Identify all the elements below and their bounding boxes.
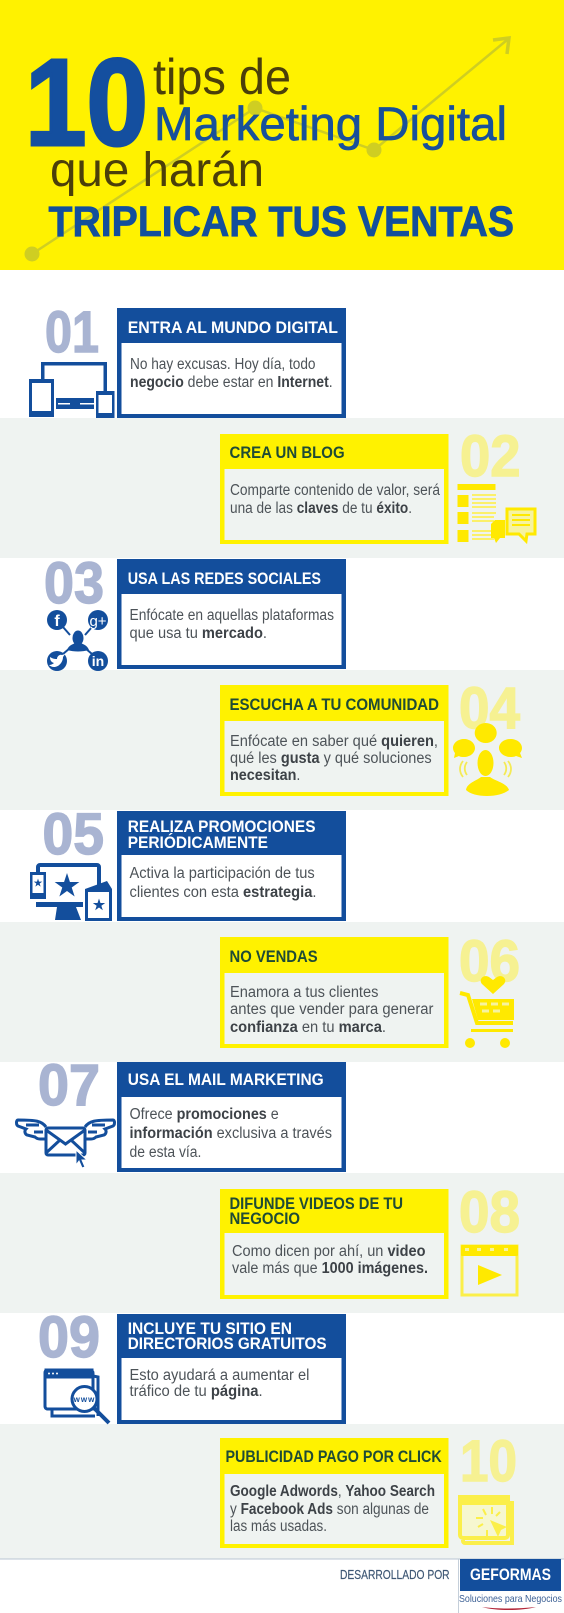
panel: tip 09: Esto ayudará a aumentar el (130, 1367, 309, 1384)
panel: tip 04: ESCUCHA A TU COMUNIDAD (230, 696, 439, 714)
icon: winged mail (16, 1120, 114, 1168)
panel: tip 10: PUBLICIDAD PAGO POR CLICK (226, 1448, 442, 1466)
panel: tip 07: USA EL MAIL MARKETING (128, 1071, 324, 1089)
panel: tip 09 (38, 1305, 346, 1424)
growth line chart (24, 38, 509, 262)
panel: tip 06 (220, 929, 520, 1048)
panel: tip 10: Google Adwords, Yahoo Search (230, 1483, 435, 1500)
title: TRIPLICAR TUS VENTAS (48, 198, 514, 246)
icon: social network: in (92, 653, 104, 669)
panel: tip 08: NEGOCIO (230, 1210, 300, 1228)
panel: tip 05: Activa la participación de tus (130, 865, 315, 882)
icon: website search (45, 1370, 109, 1423)
panel: tip 03 (44, 551, 346, 671)
icon: promotions on screens (30, 863, 112, 921)
panel: tip 06: confianza en tu marca. (230, 1019, 386, 1036)
panel: tip 10 (220, 1429, 517, 1548)
panel: tip 05: 05 (42, 802, 104, 867)
panel: tip 09: tráfico de tu página. (130, 1383, 263, 1400)
panel: tip 10: 10 (460, 1429, 517, 1494)
panel: tip 02: 02 (460, 424, 520, 489)
panel: tip 06: NO VENDAS (230, 948, 318, 966)
panel: tip 06: antes que vender para generar (230, 1001, 434, 1018)
panel: tip 03: 03 (44, 551, 104, 616)
title: que harán (50, 144, 264, 197)
panel: tip 01 (29, 300, 346, 418)
panel: tip 04: necesitan. (230, 767, 300, 784)
footer (0, 1558, 564, 1613)
panel: tip 09: 09 (38, 1305, 100, 1370)
icon: video player (461, 1245, 518, 1295)
panel: tip 06: 06 (459, 929, 520, 994)
panel: tip 08: vale más que 1000 imágenes. (232, 1260, 428, 1277)
panel: tip 07: información exclusiva a través (130, 1125, 332, 1142)
panel: tip 03: Enfócate en aquellas plataformas (130, 607, 334, 624)
panel: tip 01: ENTRA AL MUNDO DIGITAL (128, 319, 338, 337)
icon: devices (29, 362, 114, 418)
panel: tip 08: 08 (459, 1180, 520, 1245)
header banner (0, 0, 564, 270)
panel: tip 04: 04 (459, 676, 520, 741)
panel: tip 10: y Facebook Ads son algunas de (230, 1501, 429, 1518)
panel: tip 10: las más usadas. (230, 1518, 327, 1535)
icon: social network: f (54, 613, 60, 630)
panel: tip 08 (220, 1180, 520, 1299)
icon: social network (47, 610, 108, 671)
credit text: DESARROLLADO POR (340, 1567, 450, 1582)
panel: tip 01: 01 (45, 300, 99, 365)
panel: tip 09: DIRECTORIOS GRATUITOS (128, 1335, 327, 1353)
title: 10 (25, 35, 148, 172)
panel: tip 01: negocio debe estar en Internet. (130, 374, 333, 391)
panel: tip 03: que usa tu mercado. (130, 625, 267, 642)
panel: tip 02: Comparte contenido de valor, será (230, 482, 440, 499)
panel: tip 06: Enamora a tus clientes (230, 984, 379, 1001)
panel: tip 02 (220, 424, 535, 544)
icon: website search: www (73, 1395, 95, 1404)
title: Marketing Digital (154, 97, 507, 150)
icon: blog (458, 484, 535, 543)
icon: shopping cart with heart (460, 976, 514, 1048)
panel: tip 08: Como dicen por ahí, un video (232, 1243, 426, 1260)
title: tips de (153, 49, 291, 105)
panel: tip 05: REALIZA PROMOCIONES (128, 818, 316, 836)
panel: tip 02: CREA UN BLOG (230, 444, 345, 462)
icon: community speech bubbles (453, 723, 522, 796)
panel: tip 04: Enfócate en saber qué quieren, (230, 733, 438, 750)
panel: tip 01: No hay excusas. Hoy día, todo (130, 356, 316, 373)
panel: tip 07: Ofrece promociones e (130, 1106, 279, 1123)
panel: tip 03: USA LAS REDES SOCIALES (128, 570, 321, 588)
panel: tip 09: INCLUYE TU SITIO EN (128, 1320, 292, 1338)
panel: tip 05: PERIÓDICAMENTE (128, 833, 268, 852)
panel: tip 04: qué les gusta y qué soluciones (230, 750, 432, 767)
panel: tip 07: de esta vía. (130, 1144, 201, 1161)
panel: tip 07 (16, 1053, 346, 1172)
panel: tip 02: una de las claves de tu éxito. (230, 500, 412, 517)
title (25, 35, 514, 246)
panel: tip 05 (30, 802, 346, 921)
panel: tip 07: 07 (38, 1053, 100, 1118)
panel: tip 05: clientes con esta estrategia. (130, 884, 316, 901)
icon: social network: g+ (89, 613, 107, 630)
panel: tip 08: DIFUNDE VIDEOS DE TU (230, 1195, 403, 1213)
icon: pay per click window (460, 1497, 512, 1543)
panel: tip 04 (220, 676, 522, 796)
logo: Geformas (459, 1559, 562, 1610)
